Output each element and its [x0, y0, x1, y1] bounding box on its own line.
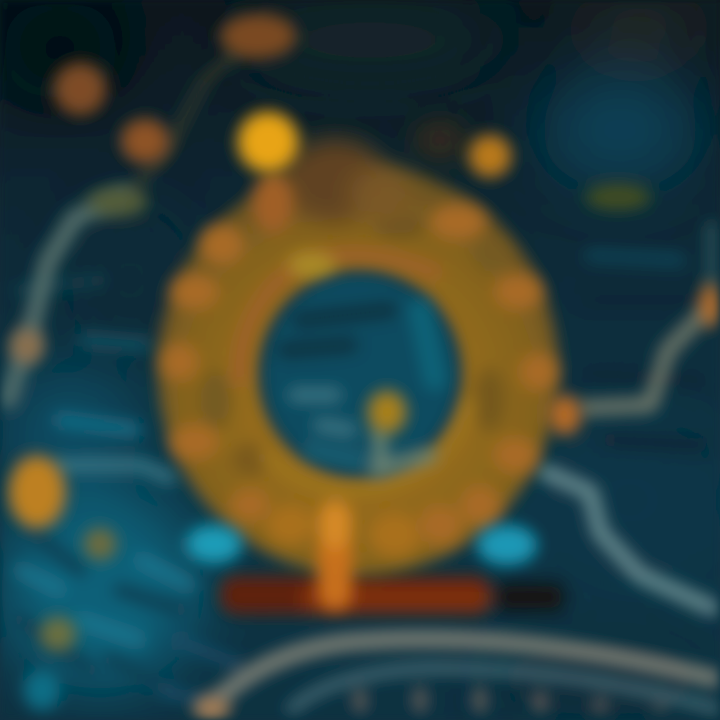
centre teal disc	[263, 274, 457, 474]
ring top brown mass	[283, 118, 468, 222]
golden ring	[158, 118, 581, 575]
circuit traces: left	[8, 40, 250, 478]
ring yellow highlight	[288, 252, 336, 278]
node: top right of ring	[469, 135, 511, 177]
ring body	[158, 165, 558, 575]
ring inner orange rim	[239, 255, 440, 385]
node: olive bar upper right	[585, 184, 651, 210]
node: left small	[10, 328, 44, 364]
circuit traces: right	[545, 225, 712, 608]
node: upper left	[121, 119, 169, 163]
glow base under the ring	[220, 576, 565, 614]
node: bottom left cyan	[24, 670, 60, 710]
ring orange nodes	[161, 204, 557, 545]
bright yellow node at top	[238, 112, 298, 172]
node: lower left	[84, 528, 116, 560]
node: olive upper left	[88, 188, 148, 216]
ring mottling	[199, 211, 506, 557]
ring lower inner rim	[262, 400, 470, 490]
ring centre	[263, 274, 457, 474]
centre details	[285, 310, 435, 470]
bottom arch of circuit lines	[160, 639, 720, 712]
background streaks	[20, 255, 700, 690]
centre orange node	[368, 391, 406, 433]
node: top left	[54, 63, 106, 115]
node: right edge	[700, 283, 720, 327]
node: bottom left	[40, 617, 76, 651]
node: top centre-left	[220, 14, 296, 58]
ring top stem	[253, 173, 293, 233]
ring bottom orange pillar	[318, 500, 352, 610]
node: bottom amber	[194, 697, 230, 719]
ring right outer node	[549, 395, 581, 435]
node: left large amber	[9, 456, 65, 528]
cyan glows at ring base	[186, 525, 537, 565]
